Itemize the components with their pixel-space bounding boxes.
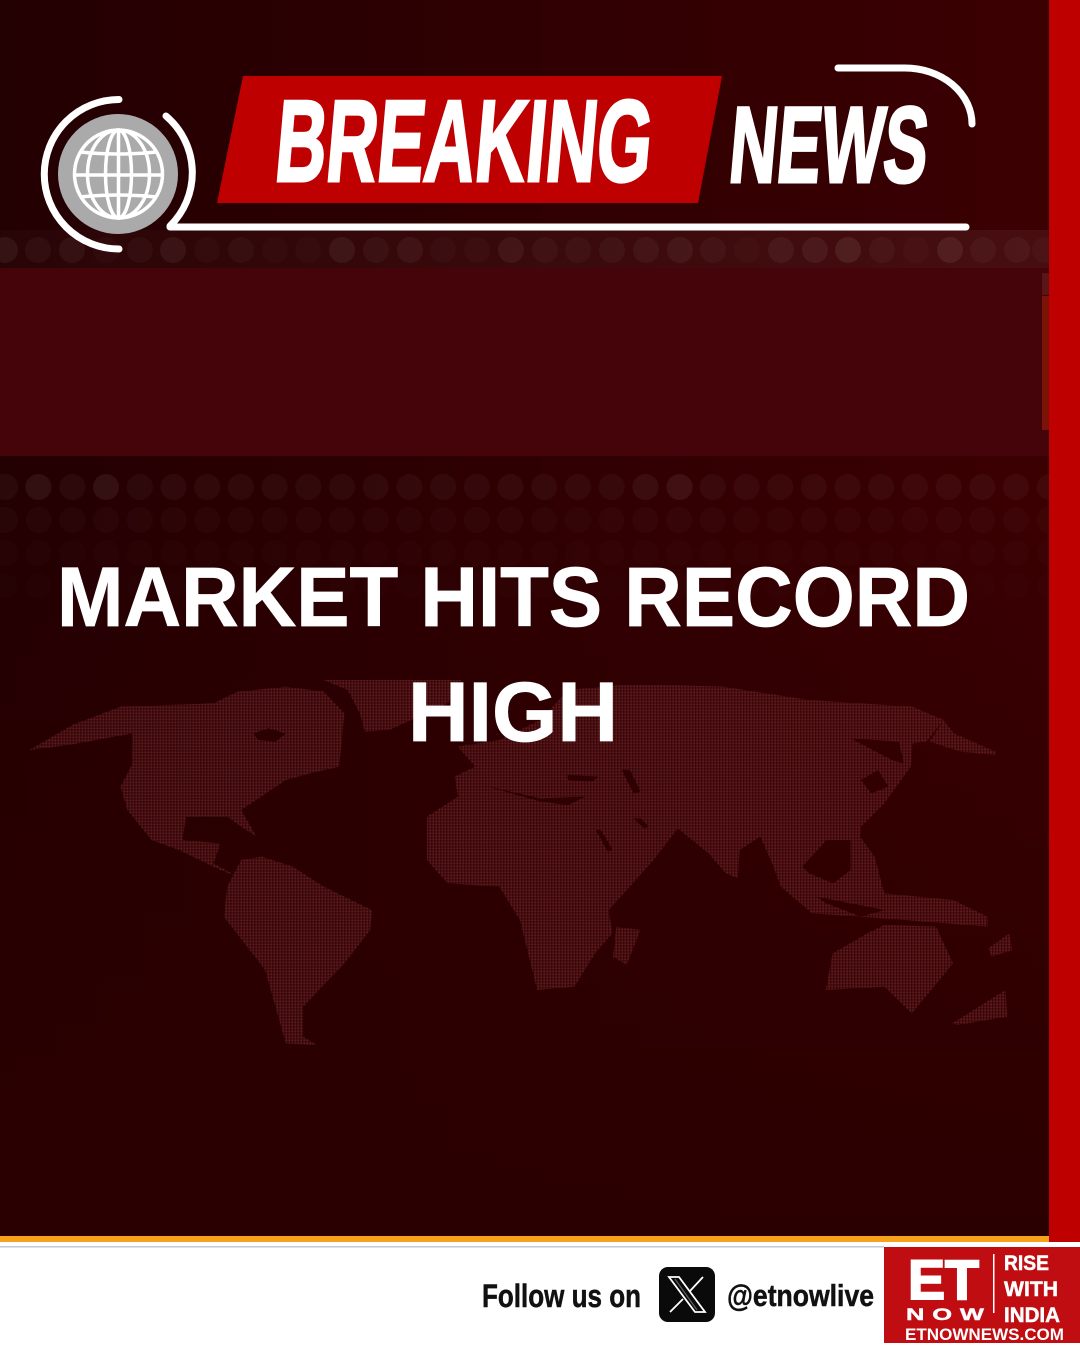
header underline — [170, 224, 966, 230]
red banner — [217, 76, 722, 203]
ET Now logo: NOW — [906, 1304, 985, 1324]
X handle: @etnowlive — [727, 1278, 874, 1313]
headline: MARKET HITS RECORD — [57, 550, 970, 644]
headline — [57, 550, 970, 759]
empty headline strip — [0, 268, 1049, 456]
icon: X logo — [659, 1267, 715, 1322]
top right corner arc — [838, 68, 972, 124]
heading: NEWS: NEWS — [725, 84, 934, 205]
thin footer rule — [0, 1246, 884, 1248]
lower dotted band — [0, 470, 1049, 602]
ET Now logo: ET — [908, 1248, 979, 1311]
ET Now logo: RISE — [1004, 1252, 1049, 1275]
upper dotted band — [0, 230, 1058, 268]
ET Now logo: WITH — [1004, 1278, 1058, 1301]
ET Now logo: ETNOWNEWS.COM — [905, 1325, 1064, 1344]
follow us text: Follow us on — [482, 1278, 641, 1314]
right red bar — [1049, 0, 1080, 1242]
orange rule — [0, 1236, 1049, 1242]
icon: globe with rings — [44, 100, 192, 249]
ET Now logo: INDIA — [1004, 1304, 1060, 1327]
footer background — [0, 1242, 1080, 1350]
headline: HIGH — [408, 665, 618, 759]
dotted world map — [29, 680, 1012, 1045]
ET Now logo — [884, 1247, 1080, 1344]
heading: BREAKING: BREAKING — [271, 76, 658, 206]
